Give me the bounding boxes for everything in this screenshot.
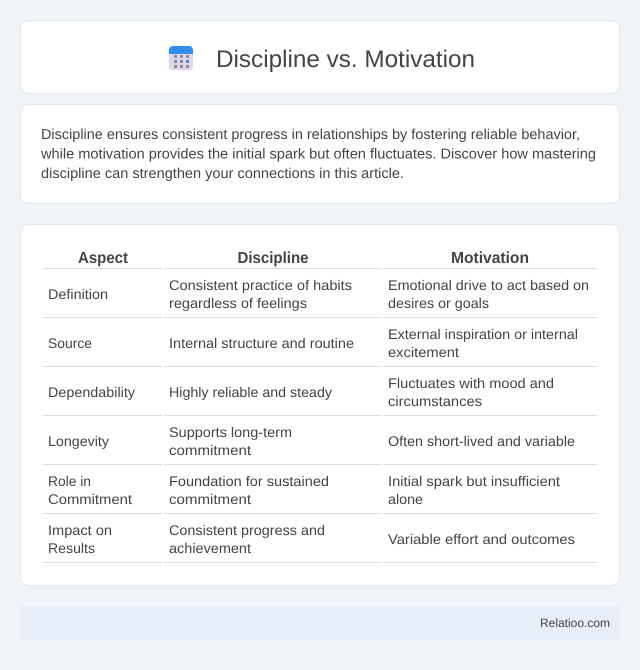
intro text (40, 127, 596, 182)
row: dependability: Fluctuates with mood and (388, 375, 554, 391)
table header (78, 250, 529, 267)
row: definition: regardless of feelings (169, 295, 307, 311)
row: dependability (48, 375, 554, 409)
table rules (43, 268, 597, 563)
intro text: while motivation provides the initial spark but often fluctuates. Discover how mastering (40, 146, 596, 162)
panel: title (20, 20, 620, 94)
row: source: Source (48, 335, 92, 351)
panel: comparison table (20, 224, 620, 586)
row: dependability: Dependability (48, 384, 135, 400)
row: dependability: Highly reliable and steady (169, 384, 332, 400)
intro text: discipline can strengthen your connections in this article. (41, 166, 404, 182)
row: role in commitment (48, 473, 560, 507)
row: longevity: commitment (169, 442, 251, 458)
row: role in commitment: Role in (48, 473, 91, 489)
row: role in commitment: alone (388, 491, 423, 507)
row: role in commitment: Initial spark but insufficient (388, 473, 560, 489)
row: impact on results: achievement (169, 540, 251, 556)
row: definition (48, 277, 589, 311)
row: impact on results: Results (48, 540, 95, 556)
row: source: External inspiration or internal (388, 326, 578, 342)
row: longevity: Longevity (48, 433, 109, 449)
row: source: Internal structure and routine (169, 335, 354, 351)
row: longevity: Supports long-term (169, 424, 292, 440)
footer text: Relatioo.com (540, 616, 610, 630)
row: longevity (48, 424, 575, 458)
row: dependability: circumstances (388, 393, 482, 409)
panel: introduction (20, 104, 620, 204)
row: impact on results: Impact on (48, 522, 112, 538)
table header: Aspect (78, 250, 129, 267)
row: role in commitment: Commitment (48, 491, 132, 507)
row: impact on results: Variable effort and outcomes (388, 531, 575, 547)
row: impact on results: Consistent progress and (169, 522, 325, 538)
row: role in commitment: commitment (169, 491, 251, 507)
table header: Motivation (451, 250, 529, 267)
row: definition: desires or goals (388, 295, 489, 311)
row: definition: Definition (48, 286, 108, 302)
row: definition: Emotional drive to act based on (388, 277, 589, 293)
row: role in commitment: Foundation for sustained (169, 473, 329, 489)
footer bar (20, 606, 620, 640)
title text: Discipline vs. Motivation (216, 46, 475, 73)
icon: calendar (169, 46, 193, 70)
row: longevity: Often short-lived and variable (388, 433, 575, 449)
row: impact on results (48, 522, 575, 556)
row: source: excitement (388, 344, 459, 360)
intro text: Discipline ensures consistent progress in relationships by fostering reliable behavior, (41, 127, 580, 143)
row: definition: Consistent practice of habits (169, 277, 352, 293)
table header: Discipline (238, 250, 309, 267)
row: source (48, 326, 578, 360)
